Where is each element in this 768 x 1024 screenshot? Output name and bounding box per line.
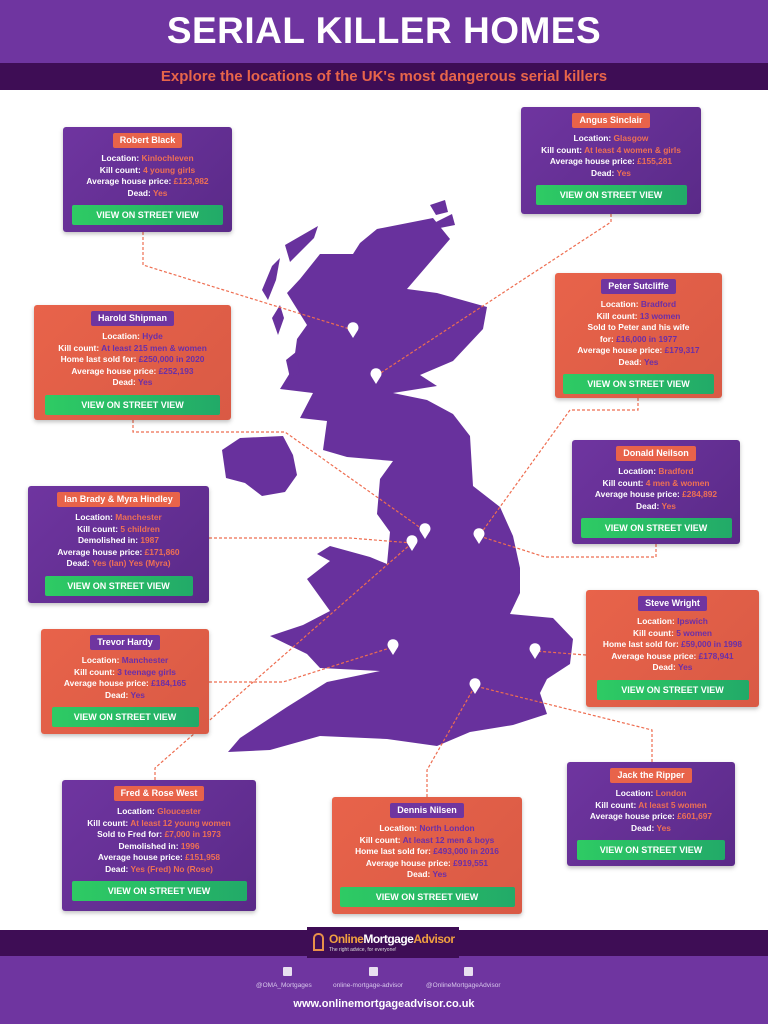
panel: Fred & Rose West: Average house price: £151,958 <box>98 852 220 862</box>
panel: Donald Neilson: Average house price: £284,892 <box>595 489 717 499</box>
panel: Steve Wright: VIEW ON STREET VIEW <box>621 684 724 694</box>
panel: Jack the Ripper: Average house price: £601,697 <box>590 811 712 821</box>
panel: Fred & Rose West: VIEW ON STREET VIEW <box>108 886 210 896</box>
social icons and handles <box>256 967 501 989</box>
panel: Trevor Hardy: Average house price: £184,165 <box>64 678 186 688</box>
panel: Steve Wright: Steve Wright <box>645 598 700 608</box>
panel: Dennis Nilsen: Home last sold for: £493,000 in 2016 <box>355 846 499 856</box>
logo: OnlineMortgageAdvisor <box>329 932 455 946</box>
panel: Ian Brady & Myra Hindley: Kill count: 5 children <box>77 524 160 534</box>
panel: Donald Neilson: Location: Bradford <box>618 466 694 476</box>
pins <box>348 322 540 694</box>
panel: Robert Black: Location: Kinlochleven <box>101 153 194 163</box>
panel: Robert Black <box>63 127 232 232</box>
panel: Donald Neilson: Kill count: 4 men & women <box>602 478 710 488</box>
social icons and handles: online-mortgage-advisor <box>333 982 403 989</box>
panel: Donald Neilson: Donald Neilson <box>623 448 689 458</box>
logo <box>307 927 459 958</box>
panel: Angus Sinclair: Dead: Yes <box>591 168 631 178</box>
panel: Peter Sutcliffe: for: £16,000 in 1977 <box>600 334 677 344</box>
panel: Ian Brady & Myra Hindley: VIEW ON STREET VIEW <box>67 580 170 590</box>
panel: Peter Sutcliffe: Kill count: 13 women <box>597 310 680 320</box>
panel: Ian Brady & Myra Hindley <box>28 486 209 603</box>
panel: Fred & Rose West: Sold to Fred for: £7,000 in 1973 <box>97 829 221 839</box>
panel: Fred & Rose West: Kill count: At least 12 young women <box>87 818 231 828</box>
panel: Dennis Nilsen: Location: North London <box>379 823 475 833</box>
panel: Dennis Nilsen: Kill count: At least 12 men & boys <box>360 834 494 844</box>
social icons and handles: @OnlineMortgageAdvisor <box>426 982 501 989</box>
panel: Jack the Ripper: Location: London <box>616 788 686 798</box>
panel: Steve Wright: Location: Ipswich <box>637 616 708 626</box>
panel: Harold Shipman: Dead: Yes <box>113 377 152 387</box>
panel: Jack the Ripper: Kill count: At least 5 women <box>595 800 707 810</box>
panel: Peter Sutcliffe: Peter Sutcliffe <box>608 281 669 291</box>
panel: Angus Sinclair <box>521 107 701 214</box>
panel: Fred & Rose West: Location: Gloucester <box>117 806 201 816</box>
panel: Angus Sinclair: Average house price: £155,281 <box>550 156 672 166</box>
panel: Harold Shipman <box>34 305 231 420</box>
panel: Harold Shipman: Home last sold for: £250,000 in 2020 <box>61 354 204 364</box>
panel: Trevor Hardy: VIEW ON STREET VIEW <box>74 712 176 722</box>
panel: Dennis Nilsen: Dennis Nilsen <box>397 805 457 815</box>
panel: Harold Shipman: Kill count: At least 215 men & women <box>58 342 207 352</box>
map: islands <box>285 226 318 262</box>
panel: Harold Shipman: Location: Hyde <box>102 331 163 341</box>
panel: Ian Brady & Myra Hindley: Demolished in: 1987 <box>78 535 159 545</box>
panel: Ian Brady & Myra Hindley: Location: Manchester <box>75 512 162 522</box>
panel: Harold Shipman: Average house price: £252,193 <box>71 366 194 376</box>
panel: Dennis Nilsen <box>332 797 522 914</box>
panel: Trevor Hardy: Trevor Hardy <box>97 637 153 647</box>
panel: Peter Sutcliffe: VIEW ON STREET VIEW <box>587 379 690 389</box>
connector lines <box>133 214 656 797</box>
panel: Robert Black: VIEW ON STREET VIEW <box>96 210 199 220</box>
panel: Robert Black: Robert Black <box>120 135 175 145</box>
subtitle <box>0 63 768 90</box>
panel: Angus Sinclair: Location: Glasgow <box>574 133 648 143</box>
website url: www.onlinemortgageadvisor.co.uk <box>293 998 475 1010</box>
map: great britain <box>222 200 573 752</box>
subtitle: Explore the locations of the UK's most dangerous serial killers <box>161 68 607 85</box>
panel: Jack the Ripper: Jack the Ripper <box>617 770 685 780</box>
panel: Dennis Nilsen: VIEW ON STREET VIEW <box>376 892 478 902</box>
map: northern ireland <box>222 436 297 496</box>
panel: Steve Wright: Average house price: £178,941 <box>611 650 734 660</box>
panel: Trevor Hardy: Dead: Yes <box>105 690 145 700</box>
social icons and handles: @OMA_Mortgages <box>256 982 312 989</box>
panel: Trevor Hardy: Location: Manchester <box>82 655 168 665</box>
panel: Peter Sutcliffe: Average house price: £179,317 <box>577 345 700 355</box>
panel: Fred & Rose West: Dead: Yes (Fred) No (Rose) <box>105 864 213 874</box>
panel: Steve Wright: Dead: Yes <box>653 662 692 672</box>
panel: Trevor Hardy <box>41 629 209 734</box>
panel: Harold Shipman: VIEW ON STREET VIEW <box>81 400 184 410</box>
panel: Peter Sutcliffe <box>555 273 722 398</box>
panel: Robert Black: Kill count: 4 young girls <box>100 164 195 174</box>
panel: Angus Sinclair: VIEW ON STREET VIEW <box>560 190 662 200</box>
panel: Harold Shipman: Harold Shipman <box>98 313 167 323</box>
panel: Robert Black: Average house price: £123,982 <box>86 176 209 186</box>
panel: Steve Wright: Kill count: 5 women <box>633 628 712 638</box>
footer bands <box>0 930 768 956</box>
panel: Fred & Rose West <box>62 780 256 911</box>
panel: Ian Brady & Myra Hindley: Ian Brady & Myra Hindley <box>64 494 173 504</box>
logo: The right advice, for everyone! <box>329 947 397 953</box>
panel: Peter Sutcliffe: Location: Bradford <box>601 299 676 309</box>
panel: Donald Neilson: VIEW ON STREET VIEW <box>605 523 707 533</box>
panel: Dennis Nilsen: Dead: Yes <box>407 869 447 879</box>
panel: Steve Wright: Home last sold for: £59,000 in 1998 <box>603 639 742 649</box>
panel: Robert Black: Dead: Yes <box>128 188 167 198</box>
panel: Donald Neilson <box>572 440 740 544</box>
panel: Peter Sutcliffe: Sold to Peter and his wife <box>588 322 689 332</box>
panel: Fred & Rose West: Demolished in: 1996 <box>118 840 200 850</box>
panel: Jack the Ripper <box>567 762 735 866</box>
panel: Steve Wright <box>586 590 759 707</box>
panel: Dennis Nilsen: Average house price: £919,551 <box>366 858 488 868</box>
panel: Ian Brady & Myra Hindley: Average house price: £171,860 <box>57 546 180 556</box>
title: SERIAL KILLER HOMES <box>167 10 601 51</box>
panel: Fred & Rose West: Fred & Rose West <box>121 788 197 798</box>
panel: Peter Sutcliffe: Dead: Yes <box>619 356 658 366</box>
header band <box>0 0 768 63</box>
panel: Jack the Ripper: Dead: Yes <box>631 822 671 832</box>
panel: Angus Sinclair: Angus Sinclair <box>579 115 642 125</box>
panel: Donald Neilson: Dead: Yes <box>636 500 676 510</box>
panel: Jack the Ripper: VIEW ON STREET VIEW <box>600 845 702 855</box>
panel: Angus Sinclair: Kill count: At least 4 women & girls <box>541 144 681 154</box>
panel: Trevor Hardy: Kill count: 3 teenage girls <box>74 666 176 676</box>
panel: Ian Brady & Myra Hindley: Dead: Yes (Ian) Yes (Myra) <box>67 558 170 568</box>
